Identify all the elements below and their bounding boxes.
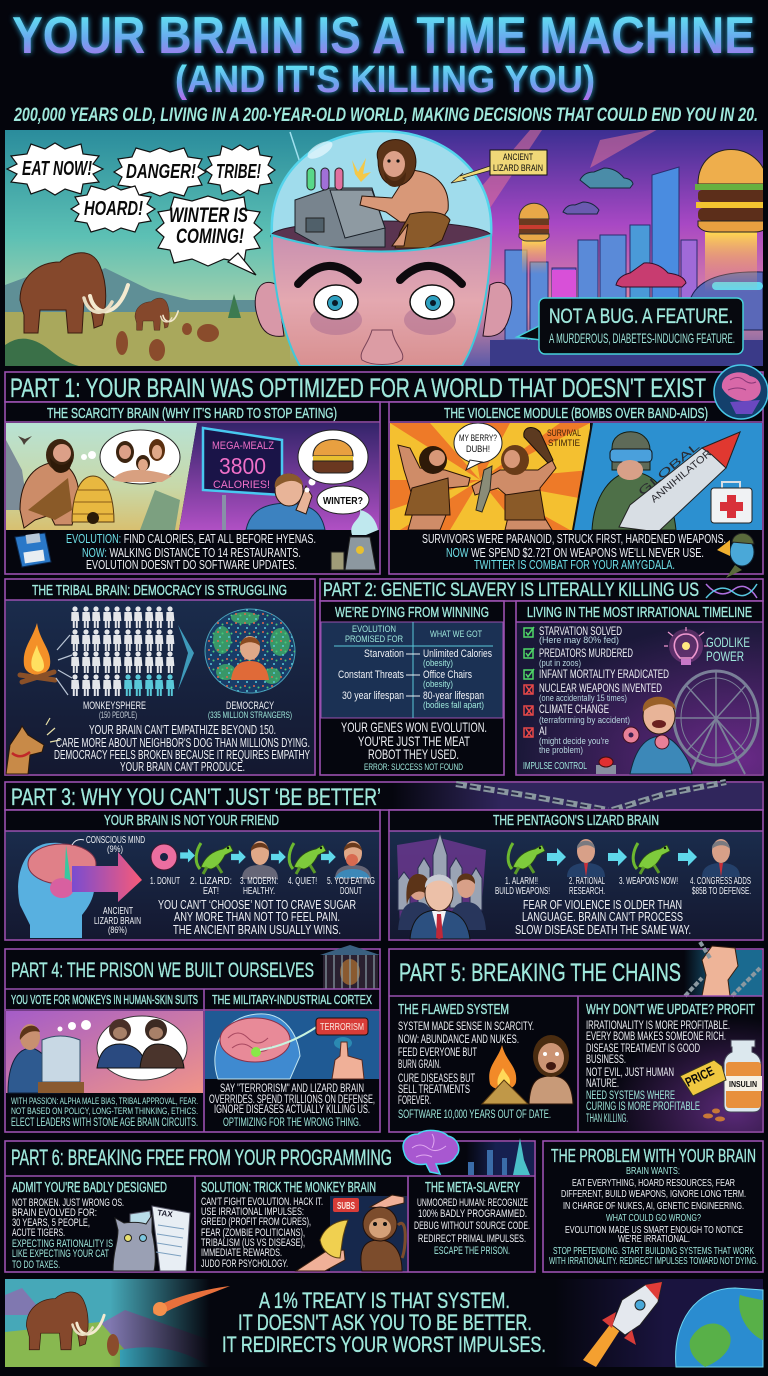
part 4 heading: PART 4: THE PRISON WE BUILT OURSELVES <box>11 959 314 982</box>
thought: family <box>81 430 180 484</box>
burst words <box>22 158 261 248</box>
comparison table: Starvation <box>364 648 404 660</box>
sequence captions: HEALTHY. <box>243 886 275 897</box>
column: admit badly designed: ACUTE TIGERS. <box>12 1227 65 1239</box>
sequence captions: 4. QUIET! <box>288 876 317 887</box>
icon: godlike power bulb: GODLIKE <box>706 634 750 650</box>
cat with tax forms <box>113 1206 190 1271</box>
burst words: EAT NOW! <box>22 158 92 180</box>
missile <box>619 432 740 532</box>
flawed system column: SYSTEM MADE SENSE IN SCARCITY. <box>398 1019 534 1033</box>
right text: SAY "TERRORISM" AND LIZARD BRAIN <box>220 1081 364 1095</box>
sequence captions <box>150 876 375 897</box>
flawed system column: SOFTWARE 10,000 YEARS OUT OF DATE. <box>398 1107 551 1121</box>
panel text <box>515 897 691 937</box>
prehistoric scene <box>5 1279 210 1367</box>
bubble: my berry: MY BERRY? <box>459 433 497 443</box>
red button <box>596 757 616 774</box>
checklist <box>524 624 669 755</box>
comparison table: (obesity) <box>423 679 453 689</box>
column: trick the monkey brain: GREED (PROFIT FROM CURES), <box>201 1216 311 1228</box>
part 6 heading: PART 6: BREAKING FREE FROM YOUR PROGRAMMING <box>11 1145 392 1170</box>
panel: part 4 prison <box>5 945 380 1132</box>
caption: survival: STIMTIE <box>548 438 580 448</box>
right text: IGNORE DISEASES ACTUALLY KILLING US. <box>214 1102 370 1116</box>
column: meta-slavery: REDIRECT PRIMAL IMPULSES. <box>418 1233 526 1245</box>
column: trick the monkey brain: CAN'T FIGHT EVOLUTION. HACK IT. <box>201 1196 323 1208</box>
column: admit badly designed: NOT BROKEN. JUST WRONG OS. <box>12 1197 124 1209</box>
panel text <box>549 1166 758 1267</box>
closing message: A 1% TREATY IS THAT SYSTEM. <box>259 1288 510 1313</box>
panel text: DEMOCRACY FEELS BROKEN BECAUSE IT REQUIRES EMPATHY <box>54 748 310 762</box>
comparison table: EVOLUTION <box>352 624 396 634</box>
burst words: TRIBE! <box>216 161 261 183</box>
icon: prison cage <box>320 945 380 989</box>
mammoth large <box>20 253 128 333</box>
checklist: AI <box>539 724 547 738</box>
insulin vial and price tag: INSULIN <box>729 1080 757 1089</box>
panel text: NOW: WALKING DISTANCE TO 14 RESTAURANTS. <box>82 545 301 560</box>
labels: monkeysphere and democracy <box>83 700 292 720</box>
comparison table: Unlimited Calories <box>423 648 492 660</box>
meteor <box>153 1286 230 1316</box>
panel text: YOUR BRAIN CAN'T PRODUCE. <box>120 760 245 774</box>
thought: burger <box>298 430 368 492</box>
mammoth small <box>135 298 178 330</box>
panel text: YOUR BRAIN CAN'T EMPATHIZE BEYOND 150. <box>89 723 276 737</box>
flawed system column: FOREVER. <box>398 1093 431 1107</box>
column: admit badly designed: 30 YEARS, 5 PEOPLE, <box>12 1217 90 1229</box>
panel: part 6 breaking free <box>5 1130 535 1272</box>
icon: godlike power bulb <box>664 627 750 665</box>
sequence: lizard, official, lizard, congress <box>508 839 740 877</box>
panel: we're dying from winning <box>320 601 504 775</box>
billboard: CALORIES! <box>213 479 270 491</box>
sequence captions: RESEARCH. <box>569 886 605 897</box>
panel text: BRAIN WANTS: <box>626 1166 680 1177</box>
head with wide eyes <box>272 235 491 366</box>
bubble: winter <box>317 486 369 514</box>
column: admit badly designed: BRAIN EVOLVED FOR: <box>12 1207 97 1219</box>
sequence captions: DONUT <box>340 886 362 897</box>
labels: conscious and ancient: (9%) <box>107 844 123 854</box>
beehive <box>72 476 114 524</box>
subheadings: YOU VOTE FOR MONKEYS IN HUMAN-SKIN SUITS <box>11 992 198 1007</box>
control machine <box>295 158 385 247</box>
labels: monkeysphere and democracy: DEMOCRACY <box>226 700 274 712</box>
sequence captions <box>495 876 751 897</box>
closing message <box>222 1288 546 1357</box>
panel title: YOUR BRAIN IS NOT YOUR FRIEND <box>104 812 279 829</box>
panel: pentagon's lizard brain <box>389 810 763 940</box>
bubble: winter: WINTER? <box>323 496 363 507</box>
terrorism button illustration: TERRORISM <box>320 1022 364 1033</box>
labels: monkeysphere and democracy: (335 MILLION STRANGERS) <box>208 710 292 720</box>
hero illustration <box>5 128 768 367</box>
panel: most irrational timeline <box>516 601 763 775</box>
checklist: INFANT MORTALITY ERADICATED <box>539 667 669 681</box>
left text <box>11 1096 198 1129</box>
column: trick the monkey brain: USE IRRATIONAL IMPULSES: <box>201 1206 304 1218</box>
sequence captions: 2. RATIONAL <box>569 876 605 887</box>
labels: conscious and ancient: CONSCIOUS MIND <box>86 835 145 846</box>
flawed system column: NOW: ABUNDANCE AND NUKES. <box>398 1032 519 1046</box>
caveman operator <box>360 139 450 248</box>
voting illustration <box>6 1011 203 1093</box>
globe of strangers <box>205 609 295 693</box>
column: meta-slavery <box>414 1179 530 1257</box>
panel text: WHAT COULD GO WRONG? <box>606 1213 701 1224</box>
label: ancient lizard brain with arrow <box>451 150 547 183</box>
caption: survival <box>547 430 581 446</box>
panel text: TWITTER IS COMBAT FOR YOUR AMYGDALA. <box>474 557 675 572</box>
icon: DNA helix <box>706 584 757 598</box>
column: admit badly designed <box>12 1179 167 1271</box>
panel title: WE'RE DYING FROM WINNING <box>335 604 489 621</box>
column: meta-slavery: ESCAPE THE PRISON. <box>434 1245 510 1257</box>
ears <box>255 282 512 336</box>
sequence: donut, lizard, human, lizard, eating <box>151 841 371 879</box>
man eating donut <box>623 697 692 774</box>
rocket and flame <box>555 1279 763 1367</box>
left text: NOT BASED ON POLICY, LONG-TERM THINKING, ETHICS. <box>11 1106 198 1117</box>
checklist: (terraforming by accident) <box>539 715 630 725</box>
callout: not a bug <box>517 298 743 354</box>
cat with tax forms: TAX <box>157 1208 174 1219</box>
nuclear plant icon <box>331 510 378 570</box>
flawed system column: CURE DISEASES BUT <box>398 1071 475 1085</box>
checklist: (one accidentally 15 times) <box>539 693 627 703</box>
panel text <box>341 719 487 772</box>
profit column: DISEASE TREATMENT IS GOOD <box>586 1043 700 1055</box>
pentagon towers and officials <box>397 833 486 939</box>
flying cars <box>563 168 686 287</box>
column: trick the monkey brain: IMMEDIATE REWARDS. <box>201 1247 282 1259</box>
bubble: my berry: DUBH! <box>466 444 490 454</box>
fighting cavemen <box>398 428 556 530</box>
checklist: STARVATION SOLVED <box>539 624 622 638</box>
panel title: THE TRIBAL BRAIN: DEMOCRACY IS STRUGGLING <box>32 582 287 599</box>
column: trick the monkey brain <box>201 1179 376 1270</box>
label: ancient lizard brain with arrow: ANCIENT <box>503 152 533 162</box>
checklist: CLIMATE CHANGE <box>539 702 609 716</box>
comparison table: PROMISED FOR <box>345 634 403 644</box>
panel: tribal brain <box>5 579 315 775</box>
column: admit badly designed: LIKE EXPECTING YOUR CAT <box>12 1248 109 1260</box>
sequence captions: 2. LIZARD: <box>190 876 232 887</box>
panel text: THE ANCIENT BRAIN USUALLY WINS. <box>173 922 341 937</box>
panel text: YOUR GENES WON EVOLUTION. <box>341 719 487 735</box>
violence illustration <box>390 423 763 532</box>
terrorism button illustration <box>205 1011 379 1079</box>
labels: monkeysphere and democracy: MONKEYSPHERE <box>83 700 146 712</box>
checklist: (might decide you're <box>539 736 609 746</box>
labels: conscious and ancient: ANCIENT <box>103 906 133 917</box>
panel: violence module <box>389 402 763 578</box>
flawed system column <box>398 1001 551 1121</box>
closing banner <box>5 1279 763 1367</box>
panel: your brain is not your friend <box>5 810 380 940</box>
missile: GLOBAL <box>636 440 702 498</box>
hunters <box>116 323 219 361</box>
part 3 header: PART 3: WHY YOU CAN'T JUST ‘BE BETTER’ <box>11 784 381 811</box>
right text <box>209 1081 375 1129</box>
speech bursts <box>7 143 275 275</box>
checklist: PREDATORS MURDERED <box>539 646 633 660</box>
caption: survival: SURVIVAL <box>547 428 581 438</box>
billboard <box>203 428 282 530</box>
sequence captions: 3. MODERN: <box>240 876 278 887</box>
column: trick the monkey brain: SOLUTION: TRICK THE MONKEY BRAIN <box>201 1179 376 1196</box>
title <box>12 7 755 101</box>
sequence captions: 5. YOU EATING <box>327 876 375 887</box>
burning grain and caveman <box>482 1035 573 1104</box>
panel text <box>54 723 310 774</box>
missile: ANNIHILATOR <box>649 448 714 505</box>
caveman <box>20 439 79 528</box>
comparison table: Constant Threats <box>338 669 404 681</box>
panel: the problem with your brain <box>543 1141 763 1272</box>
panel text: YOU CAN'T ‘CHOOSE’ NOT TO CRAVE SUGAR <box>158 897 356 912</box>
scarcity illustration <box>6 423 380 530</box>
column: trick the monkey brain: FEAR (ZOMBIE POLITICIANS), <box>201 1227 305 1239</box>
panel text: ERROR: SUCCESS NOT FOUND <box>364 762 463 772</box>
checklist: the problem) <box>539 745 583 755</box>
comparison table: Office Chairs <box>423 669 472 681</box>
futuristic city <box>385 128 763 366</box>
monkey, banana and button: SUBS <box>337 1201 355 1212</box>
billboard: 3800 <box>219 453 266 479</box>
checklist: (put in zoos) <box>539 658 581 668</box>
icon: neon brain and skyline <box>403 1130 534 1175</box>
labels: conscious and ancient: (86%) <box>108 925 127 935</box>
comparison table: 30 year lifespan <box>342 690 404 702</box>
profit column: NATURE. <box>586 1078 619 1090</box>
billboard: MEGA-MEALZ <box>212 440 274 452</box>
label: ancient lizard brain with arrow: LIZARD BRAIN <box>493 163 543 173</box>
column: meta-slavery: UNMOORED HUMAN: RECOGNIZE <box>417 1197 528 1209</box>
comparison table: (bodies fall apart) <box>423 700 484 710</box>
burger large with flame <box>695 150 768 292</box>
burst words: HOARD! <box>84 198 143 220</box>
panel text: SLOW DISEASE DEATH THE SAME WAY. <box>515 922 691 937</box>
column: trick the monkey brain: TRIBALISM (US VS DISEASE), <box>201 1237 305 1249</box>
labels: conscious and ancient: LIZARD BRAIN <box>94 916 141 927</box>
profit column: BUSINESS. <box>586 1054 626 1066</box>
bird in helmet icon <box>717 533 754 578</box>
icon: campfire <box>20 623 72 695</box>
right text: OPTIMIZING FOR THE WRONG THING. <box>223 1115 361 1129</box>
sequence captions: 3. WEAPONS NOW! <box>619 876 678 887</box>
profit column: NOT EVIL, JUST HUMAN <box>586 1067 674 1079</box>
comparison table <box>321 622 503 718</box>
column: trick the monkey brain: JUDO FOR PSYCHOLOGY. <box>201 1258 288 1270</box>
panel text: FEAR OF VIOLENCE IS OLDER THAN <box>523 897 682 912</box>
labels: conscious and ancient <box>86 835 145 935</box>
profit column: CURING IS MORE PROFITABLE <box>586 1101 700 1113</box>
column: meta-slavery: THE META-SLAVERY <box>425 1179 520 1196</box>
flawed system column: FEED EVERYONE BUT <box>398 1045 477 1059</box>
monkey, banana and button <box>296 1195 407 1271</box>
icon: brain circle <box>714 365 768 419</box>
panel text: ANY MORE THAN NOT TO FEEL PAIN. <box>174 909 340 924</box>
profit column: THAN KILLING. <box>586 1113 628 1125</box>
checklist: (Here may 80% fed) <box>539 635 619 645</box>
column: admit badly designed: EXPECTING RATIONALITY IS <box>12 1238 113 1250</box>
comparison table: 80-year lifespan <box>423 690 484 702</box>
panel text: EVOLUTION: FIND CALORIES, EAT ALL BEFORE HYENAS. <box>66 531 316 546</box>
panel text: ROBOT THEY USED. <box>368 746 459 762</box>
head with brain and arrow <box>18 840 142 938</box>
sequence captions: EAT! <box>203 886 219 897</box>
closing message: IT DOESN'T ASK YOU TO BE BETTER. <box>238 1310 532 1335</box>
comparison table: (obesity) <box>423 658 453 668</box>
planet earth <box>676 1288 763 1367</box>
hamster wheel <box>674 671 758 774</box>
panel text: EVOLUTION DOESN'T DO SOFTWARE UPDATES. <box>86 557 297 572</box>
impulse control label: IMPULSE CONTROL <box>523 761 587 772</box>
icon: fist with broken chain <box>684 942 762 996</box>
icon: godlike power bulb: POWER <box>706 648 744 664</box>
insulin vial and price tag: PRICE <box>683 1063 716 1090</box>
panel text <box>422 531 726 572</box>
panel text: YOU'RE JUST THE MEAT <box>358 733 470 749</box>
burst words: DANGER! <box>126 161 196 183</box>
left text: ELECT LEADERS WITH STONE AGE BRAIN CIRCUITS. <box>11 1115 198 1129</box>
bubble: my berry <box>454 423 502 470</box>
burger small with flame <box>519 203 549 274</box>
sequence captions: 1. DONUT <box>150 876 180 887</box>
flawed system column: SELL TREATMENTS <box>398 1082 470 1096</box>
sequence captions: 1. ALARM!! <box>505 876 538 887</box>
column: admit badly designed: TO DO TAXES. <box>12 1259 60 1271</box>
title: (AND IT'S KILLING YOU) <box>175 59 595 101</box>
checklist: NUCLEAR WEAPONS INVENTED <box>539 681 662 695</box>
part 3 header <box>5 782 763 811</box>
sequence captions: BUILD WEAPONS! <box>495 886 550 897</box>
floppy disk icon <box>15 533 51 567</box>
profit column: NEED SYSTEMS WHERE <box>586 1090 675 1102</box>
flawed system column: THE FLAWED SYSTEM <box>398 1001 509 1018</box>
panel text: WE'RE IRRATIONAL. <box>618 1233 690 1245</box>
panel title: THE PENTAGON'S LIZARD BRAIN <box>493 812 659 829</box>
insulin vial and price tag <box>680 1040 762 1122</box>
panel text <box>66 531 316 572</box>
arrow to globe <box>178 625 194 690</box>
labels: monkeysphere and democracy: (150 PEOPLE) <box>99 710 137 720</box>
left text: WITH PASSION: ALPHA MALE BIAS, TRIBAL APPROVAL, FEAR. <box>11 1096 198 1107</box>
first aid kit <box>711 482 752 523</box>
panel title: THE SCARCITY BRAIN (WHY IT'S HARD TO STOP EATING) <box>47 405 337 422</box>
right text: OVERRIDES. SPEND TRILLIONS ON DEFENSE, <box>209 1092 375 1106</box>
burst words: WINTER IS <box>169 204 248 227</box>
column: admit badly designed: ADMIT YOU'RE BADLY DESIGNED <box>12 1179 167 1196</box>
prehistoric landscape <box>5 130 385 367</box>
panel: scarcity brain <box>5 402 380 574</box>
column: meta-slavery: 100% BADLY PROGRAMMED. <box>418 1208 527 1220</box>
soldier <box>592 432 676 530</box>
subheadings: THE MILITARY-INDUSTRIAL CORTEX <box>212 992 372 1007</box>
column: meta-slavery: DEBUG WITHOUT SOURCE CODE. <box>414 1220 530 1232</box>
profit column <box>586 1001 755 1125</box>
panel text: CARE MORE ABOUT NEIGHBOR'S DOG THAN MILLIONS DYING. <box>56 736 310 750</box>
flawed system column: BURN GRAIN. <box>398 1057 441 1071</box>
burst words: COMING! <box>176 225 244 248</box>
panel: part 5 breaking the chains <box>389 942 763 1132</box>
people grid: monkeysphere <box>71 606 174 696</box>
comparison table: WHAT WE GOT <box>430 629 482 639</box>
brain dome <box>271 131 491 251</box>
closing message: IT REDIRECTS YOUR WORST IMPULSES. <box>222 1332 546 1357</box>
panel text: LANGUAGE. BRAIN CAN'T PROCESS <box>522 909 683 924</box>
panel text <box>158 897 356 937</box>
chain banner background <box>392 782 762 810</box>
icon: barking dog <box>6 718 60 774</box>
worried man <box>246 473 325 530</box>
